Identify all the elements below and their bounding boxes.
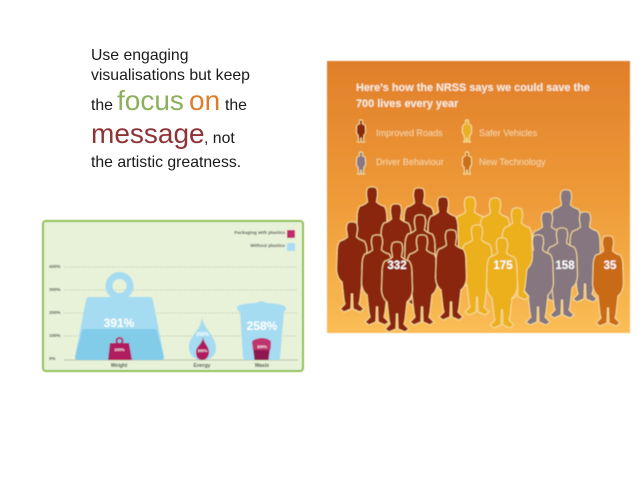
grid and axis	[64, 267, 298, 336]
axis labels: Energy	[194, 363, 211, 369]
icon: small bin	[252, 338, 271, 360]
text block: message	[91, 47, 250, 171]
panel: plastics chart: 200%	[49, 310, 61, 315]
legend: New Technology	[479, 157, 546, 167]
text block: message: Use engaging	[91, 47, 188, 64]
icon: large weight: 391%	[104, 316, 135, 330]
numbers	[387, 260, 617, 272]
text block: message: message	[91, 118, 205, 149]
text block: message: on	[189, 85, 220, 116]
legend	[234, 230, 295, 251]
numbers: 332	[387, 260, 407, 272]
icon: small weight	[108, 338, 132, 360]
panel: plastics chart	[43, 221, 303, 371]
text block: message: focus	[117, 85, 184, 116]
numbers: 175	[493, 260, 513, 272]
legend: Packaging with plastics	[234, 230, 285, 235]
icon: large flame	[189, 317, 216, 360]
people: grey group	[522, 190, 600, 325]
legend	[356, 120, 546, 174]
numbers: 35	[604, 260, 617, 272]
text block: message: the	[225, 97, 247, 114]
axis labels: Weight	[111, 363, 128, 369]
heading: 700 lives every year	[356, 98, 459, 110]
text block: message: the artistic greatness.	[91, 154, 241, 171]
icon: large weight	[75, 276, 164, 360]
panel: NRSS lives saved	[327, 61, 630, 333]
text block: message: visualisations but keep	[91, 67, 250, 84]
heading: Here's how the NRSS says we could save the	[356, 82, 590, 94]
icon: large bin	[237, 301, 286, 360]
icon: small flame: 100%	[198, 349, 208, 353]
legend: Safer Vehicles	[479, 128, 538, 138]
axis labels: Waste	[255, 363, 269, 369]
panel: plastics chart: 400%	[49, 264, 61, 269]
legend: Driver Behaviour	[376, 157, 444, 167]
icon: small weight: 100%	[114, 347, 125, 352]
icon: small bin: 100%	[257, 345, 267, 349]
text block: message: the	[91, 97, 113, 114]
panel: plastics chart: 100%	[49, 333, 61, 338]
people: yellow group	[454, 197, 532, 328]
people: maroon group	[336, 187, 466, 332]
panel: plastics chart: 300%	[49, 287, 61, 292]
legend: Without plastics	[250, 243, 285, 248]
icon: large bin: 258%	[247, 319, 278, 333]
legend: Improved Roads	[376, 128, 443, 138]
panel: plastics chart: 0%	[49, 356, 56, 361]
icon: large flame: 200%	[196, 332, 209, 338]
numbers: 158	[555, 260, 575, 272]
icon: small flame	[196, 337, 209, 360]
heading	[356, 82, 590, 110]
axis labels	[111, 363, 269, 369]
person: orange	[592, 236, 624, 326]
text block: message: , not	[204, 130, 235, 147]
